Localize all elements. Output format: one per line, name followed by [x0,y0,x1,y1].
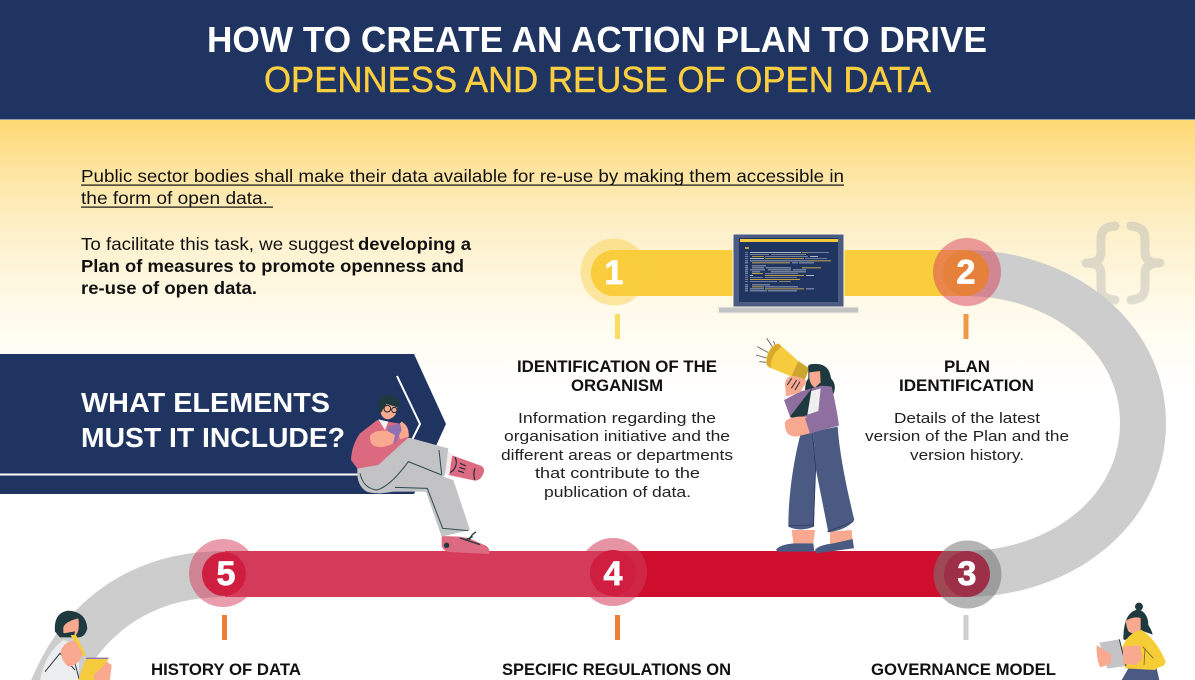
step 1 heading: ORGANISM [571,377,663,395]
step 1 marker: 1 [605,254,623,292]
illustration: woman with megaphone [756,338,854,553]
step 5 marker: 5 [217,555,235,593]
red road segment right [613,551,967,597]
intro text: re-use of open data. [81,278,257,298]
illustration: woman with notepad [40,611,112,680]
intro text: To facilitate this task, we suggest [81,234,354,254]
step 1 description: Information regarding the [518,410,716,427]
intro text: Public sector bodies shall make their data available for re-use by making them accessible in [81,166,844,186]
intro text: the form of open data. [81,188,268,208]
step 3 marker: 3 [958,555,976,593]
grey road curve right [965,273,1143,574]
step 2 description: version of the Plan and the [865,428,1069,445]
title: OPENNESS AND REUSE OF OPEN DATA [264,59,931,100]
title [207,19,987,100]
tick 3 [964,615,968,640]
step 4 marker [579,538,647,606]
step 3 heading: GOVERNANCE MODEL [871,661,1056,679]
grey road curve left [48,574,225,680]
banner: what elements [0,354,446,494]
illustration: man sitting with phone [351,395,489,554]
step 5 marker [189,539,257,607]
step 2 marker [933,238,1001,306]
banner: what elements: WHAT ELEMENTS [81,387,330,418]
step 3 marker [934,540,1002,608]
step 2 description [865,410,1069,464]
step 2 heading [899,358,1034,395]
step 1 heading: IDENTIFICATION OF THE [517,358,717,376]
illustration: woman with tablet [1097,603,1166,680]
icon: laptop with code [717,234,859,314]
step 1 description [501,410,733,501]
step 4 marker: 4 [604,555,623,593]
step 1 description: different areas or departments [501,447,733,464]
title: HOW TO CREATE AN ACTION PLAN TO DRIVE [207,19,987,60]
tick 1 [615,314,620,339]
step 1 description: that contribute to the [535,465,700,482]
red road segment left [225,551,613,597]
step 2 description: version history. [910,447,1024,464]
tick 5 [222,615,227,640]
header band [0,0,1195,120]
step 1 description: publication of data. [544,484,691,501]
step 1 marker [580,238,648,306]
intro text: Plan of measures to promote openness and [81,256,464,276]
banner: what elements: MUST IT INCLUDE? [81,422,345,453]
intro text: developing a [358,234,471,254]
step 2 marker: 2 [957,254,975,292]
step 2 description: Details of the latest [894,410,1041,427]
decorative curly braces icon [1086,226,1160,300]
tick 4 [615,615,620,640]
step 2 heading: PLAN [944,358,990,376]
step 1 description: organisation initiative and the [504,428,730,445]
step 4 heading: SPECIFIC REGULATIONS ON [502,661,731,679]
tick 2 [964,314,968,339]
step 1 heading [517,358,717,395]
step 5 heading: HISTORY OF DATA [151,661,301,679]
intro text [81,166,844,298]
yellow road segment [591,250,965,296]
step 2 heading: IDENTIFICATION [899,377,1034,395]
